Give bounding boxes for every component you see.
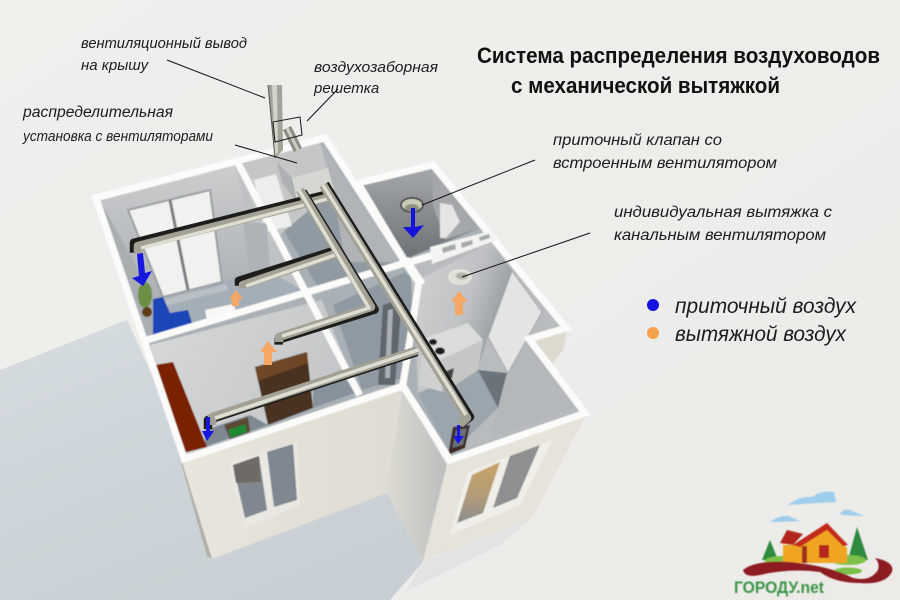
exhaust duct to bedroom <box>279 190 375 345</box>
distribution unit with fans <box>277 148 334 205</box>
outer wall faces <box>178 327 587 561</box>
roof vent pipe <box>268 85 283 158</box>
room: corridor <box>243 142 400 287</box>
logo bushes <box>765 555 866 574</box>
room: lower corridor <box>333 272 417 390</box>
supply duct to living room <box>134 195 327 254</box>
ceiling supply valve <box>401 198 423 212</box>
stove and counter <box>418 323 483 392</box>
legend: supply air: приточный воздух <box>675 295 857 318</box>
logo <box>734 492 892 597</box>
label: roof vent outlet: вентиляционный вывод <box>81 35 247 52</box>
supply duct to bedroom <box>208 350 418 429</box>
label: distribution unit: установка с вентиляторами <box>22 128 214 145</box>
leader line: air intake grille <box>307 89 338 121</box>
label: roof vent outlet: на крышу <box>81 57 150 74</box>
logo house <box>780 523 848 563</box>
logo wordmark: ГОРОДУ.net <box>734 578 824 597</box>
window <box>128 190 222 297</box>
soft shadow under right wall <box>405 517 533 592</box>
white wall tops <box>96 138 585 460</box>
label: air intake grille: воздухозаборная <box>314 59 438 76</box>
apartment floor plan base <box>93 137 587 463</box>
logo road ribbon <box>743 558 892 583</box>
leader line: distribution unit <box>235 145 297 163</box>
dark wall <box>478 370 507 408</box>
blue arrow: bedroom <box>202 417 214 441</box>
bookshelf <box>255 352 313 425</box>
blue arrow: small room <box>403 208 424 238</box>
orange arrow: bedroom <box>260 341 277 365</box>
long supply duct to kitchen <box>323 184 470 424</box>
leader line: roof outlet <box>167 60 265 98</box>
wall vent section with slots <box>430 231 497 264</box>
label: supply valve: приточный клапан со <box>553 132 722 149</box>
east wall section <box>490 340 577 438</box>
room: bedroom <box>150 300 357 455</box>
blue arrow: living room <box>132 253 152 286</box>
wardrobe <box>155 362 207 453</box>
legend <box>647 295 857 346</box>
room: kitchen <box>410 240 580 455</box>
title: с механической вытяжкой <box>511 73 780 98</box>
right window with warm glow <box>450 440 552 535</box>
label: distribution unit: распределительная <box>22 104 173 121</box>
label: air intake grille: решетка <box>313 80 379 97</box>
house shadow on the floor <box>0 320 423 600</box>
front window <box>228 442 300 528</box>
air intake grille frame <box>273 117 302 142</box>
room: small room with supply valve <box>358 165 482 258</box>
leader line: exhaust fan <box>462 233 590 277</box>
label: individual exhaust: канальным вентилятором <box>614 227 826 244</box>
label: supply valve: встроенным вентилятором <box>553 155 777 172</box>
orange arrow: kitchen <box>451 291 468 315</box>
title: Система распределения воздуховодов <box>477 43 880 68</box>
kitchen window <box>488 271 542 373</box>
title <box>477 43 880 98</box>
window mullion <box>170 200 188 290</box>
window sill <box>163 284 228 306</box>
exhaust duct to living room <box>239 251 335 288</box>
label: individual exhaust: индивидуальная вытяжка с <box>614 204 832 221</box>
ceiling exhaust fan <box>449 270 471 284</box>
leader line: supply valve <box>422 160 535 205</box>
apartment 3D model <box>93 137 587 561</box>
logo trees <box>762 527 868 560</box>
legend: exhaust air: вытяжной воздух <box>675 323 847 346</box>
white table <box>205 304 237 321</box>
blue arrow: kitchen <box>453 425 464 444</box>
air intake pipe <box>287 128 298 150</box>
orange arrow: living room <box>229 290 243 306</box>
plant <box>138 282 152 317</box>
kitchen floor <box>418 368 498 455</box>
green box <box>224 417 250 439</box>
logo clouds <box>770 492 864 522</box>
room: living room with window <box>100 165 318 336</box>
radiator with supply arrow <box>448 425 470 455</box>
blue chair <box>153 297 192 336</box>
